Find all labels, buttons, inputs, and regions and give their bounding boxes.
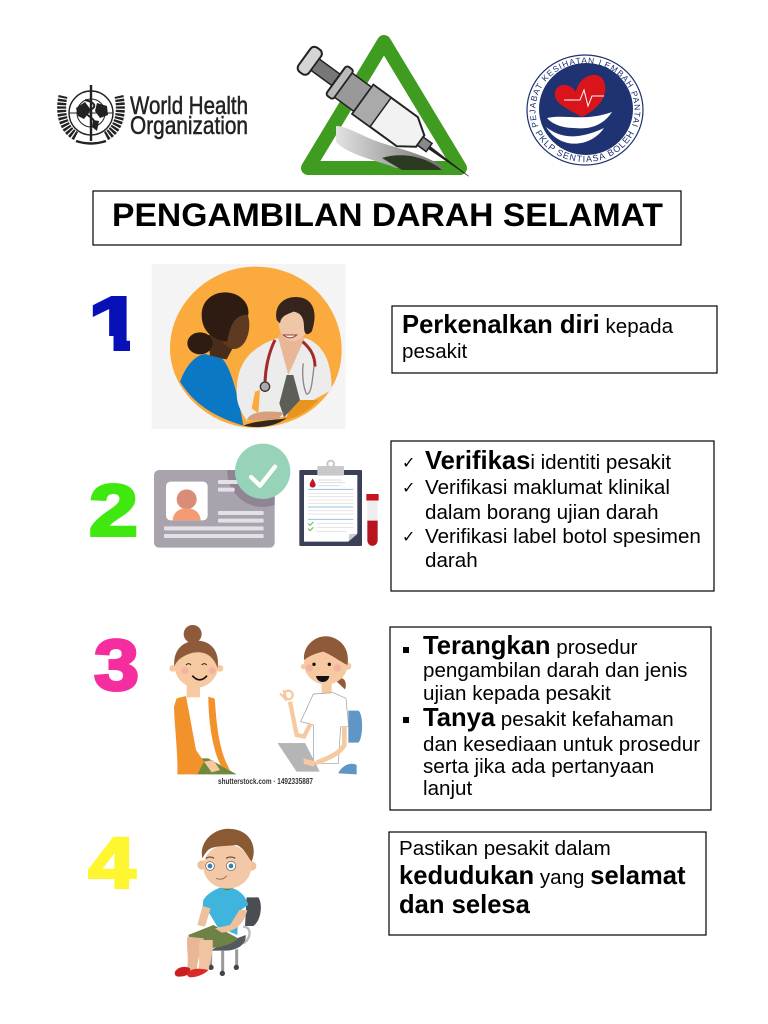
text block: step 2: ✓ (402, 453, 415, 472)
text block: step 4: kedudukan yang selamat (399, 862, 686, 890)
text block: step 3: serta jika ada pertanyaan (423, 755, 654, 778)
logo: World Health Organization: Organization (130, 112, 248, 140)
figure: nurse with tablet (278, 636, 362, 774)
text block: step 4: Pastikan pesakit dalam (399, 837, 611, 860)
number 3: 3 (94, 626, 139, 706)
logo: World Health Organization (62, 85, 248, 144)
illustration: patient meeting doctor (152, 264, 346, 429)
text block: step 2: ✓ (402, 527, 415, 546)
icon: blood tube (366, 494, 379, 546)
icon: ID card (154, 444, 290, 548)
title: PENGAMBILAN DARAH SELAMAT (112, 197, 663, 233)
text block: step 3: dan kesediaan untuk prosedur (423, 733, 700, 756)
number 4: 4 (88, 824, 136, 904)
text block: step 4 (389, 832, 706, 935)
illustration: identity card and clipboard (154, 444, 379, 548)
text block: step 2: dalam borang ujian darah (425, 501, 659, 524)
illustration: patient and nurse talking (169, 625, 362, 774)
logo: Pejabat Kesihatan Lembah Pantai: PEJABAT KESIHATAN LEMBAH PANTAI (530, 58, 640, 128)
watermark: shutterstock: shutterstock.com · 1492335887 (218, 776, 313, 786)
icon: clipboard form (299, 461, 362, 546)
text block: step 2 (391, 441, 714, 591)
text block: step 2: darah (425, 549, 478, 572)
logo: Pejabat Kesihatan Lembah Pantai: PKLP SENTIASA BOLEH (536, 130, 634, 162)
text block: step 2: Verifikasi identiti pesakit (425, 447, 671, 475)
text block: step 3 (390, 627, 711, 810)
text block: step 2: Verifikasi maklumat klinikal (425, 476, 670, 499)
number 2: 2 (89, 470, 138, 552)
text block: step 3: Terangkan prosedur (423, 632, 638, 660)
text block: step 3: ujian kepada pesakit (423, 682, 611, 705)
text block: step 3: pengambilan darah dan jenis (423, 659, 687, 682)
text block: step 4: dan selesa (399, 891, 531, 919)
text block: step 2: Verifikasi label botol spesimen (425, 525, 701, 548)
illustration: boy seated on chair (175, 829, 261, 977)
logo: Pejabat Kesihatan Lembah Pantai (526, 54, 644, 166)
text block: step 1: Perkenalkan diri kepada (402, 311, 674, 339)
text block: step 1 (392, 306, 717, 373)
text block: step 1: pesakit (402, 340, 468, 363)
text block: step 2: ✓ (402, 478, 415, 497)
logo: World Health Organization: World Health (130, 92, 248, 120)
figure: seated woman (169, 625, 237, 774)
text block: step 3: Tanya pesakit kefahaman (423, 704, 674, 732)
icon: syringe on green triangle (294, 42, 479, 191)
title (93, 191, 681, 245)
text block: step 3: lanjut (423, 777, 473, 800)
number 1: 1 (88, 282, 143, 367)
